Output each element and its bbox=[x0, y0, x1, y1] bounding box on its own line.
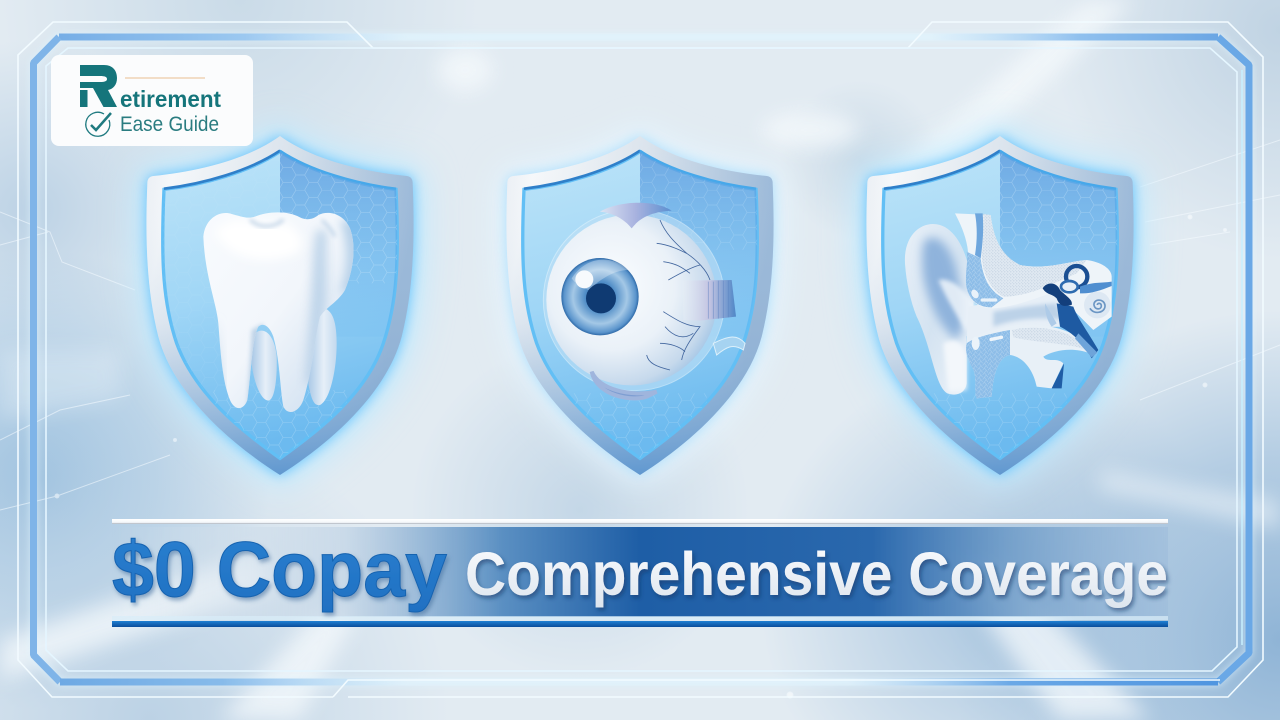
logo: Retirement Ease Guide card bbox=[51, 55, 253, 146]
shield: bevelled metal rim bbox=[866, 136, 1134, 475]
icon: check badge bbox=[86, 112, 111, 136]
icon: R monogram bbox=[80, 65, 117, 107]
panel: dental shield bbox=[146, 136, 414, 475]
decorative network lines and sparkles bbox=[0, 140, 1280, 698]
banner: coverage headline bbox=[112, 519, 1168, 627]
icon: ear anatomy cross-section bbox=[905, 213, 1112, 398]
shield: bevelled metal rim bbox=[146, 136, 414, 475]
icon: eyeball bbox=[543, 203, 745, 398]
logo wordmark: Ease Guide: Ease Guide bbox=[120, 113, 219, 136]
icon: tooth bbox=[203, 212, 360, 412]
shield: bevelled metal rim bbox=[506, 136, 774, 475]
logo wordmark: etirement: etirement bbox=[120, 86, 221, 112]
headline: $0 Copay: $0 Copay bbox=[112, 525, 447, 613]
headline: Comprehensive Coverage: Comprehensive Coverage bbox=[465, 540, 1168, 608]
panel: hearing shield bbox=[866, 136, 1134, 475]
panel: vision shield bbox=[506, 136, 774, 475]
